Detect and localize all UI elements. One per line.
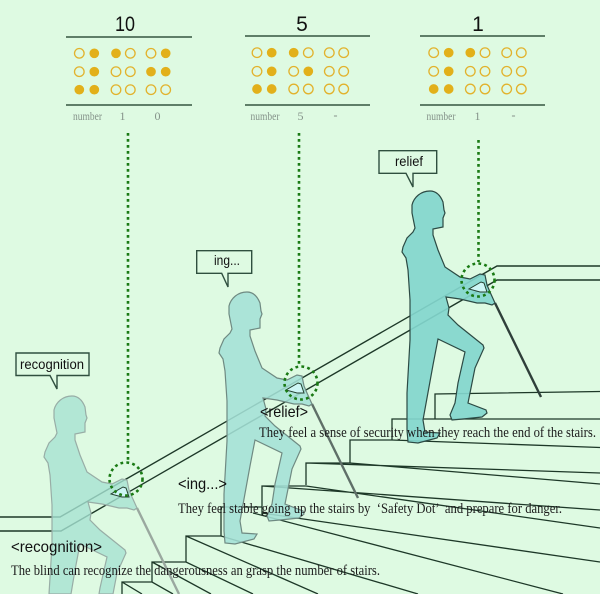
- braille panel: number 10: 10: [115, 13, 135, 36]
- braille panel: number 1: 1: [474, 109, 480, 123]
- text block: ing...: [178, 476, 562, 517]
- speech bubble: relief: relief: [395, 154, 423, 169]
- braille panel: number 10: 0: [154, 109, 160, 123]
- braille panel: number 10: [66, 13, 192, 123]
- text block: ing...: <ing...>: [178, 476, 227, 493]
- braille panel: number 1: 1: [472, 13, 484, 36]
- braille panel: number 5: 5: [296, 13, 308, 36]
- handrail: [0, 266, 600, 531]
- text block: relief: <relief>: [260, 404, 308, 421]
- text block: recognition: <recognition>: [11, 539, 102, 556]
- figure: person at the bottom of the stairs with cane: [44, 396, 179, 594]
- text block: recognition: [11, 539, 380, 579]
- figure: person in the middle of the stairs with cane: [219, 292, 358, 544]
- dotted connector and circle: number 10: [110, 133, 142, 496]
- braille panel: number 5: number: [250, 109, 280, 123]
- text block: recognition: The blind can recognize the dangerousness an grasp the number of stairs.: [11, 563, 380, 579]
- speech bubble: relief: [379, 151, 437, 187]
- braille panel: number 10: 1: [120, 109, 126, 123]
- speech bubble: ing...: ing...: [214, 253, 240, 268]
- braille panel: number 5: [245, 13, 370, 123]
- braille panel: number 1: -: [512, 108, 516, 122]
- speech bubble: recognition: recognition: [20, 357, 84, 372]
- braille panel: number 1: [420, 13, 545, 123]
- dotted connector and circle: number 5: [284, 133, 318, 400]
- speech bubble: ing...: [197, 251, 252, 287]
- speech bubble: recognition: [16, 353, 89, 389]
- braille panel: number 10: number: [73, 109, 102, 123]
- dotted connector and circle: number 1: [462, 140, 494, 296]
- text block: relief: [259, 404, 596, 441]
- stairs: [122, 392, 600, 594]
- figure: person at the top of the stairs with cane: [402, 191, 541, 443]
- braille panel: number 1: number: [426, 109, 456, 123]
- braille panel: number 5: -: [334, 108, 338, 122]
- braille panel: number 5: 5: [298, 109, 304, 123]
